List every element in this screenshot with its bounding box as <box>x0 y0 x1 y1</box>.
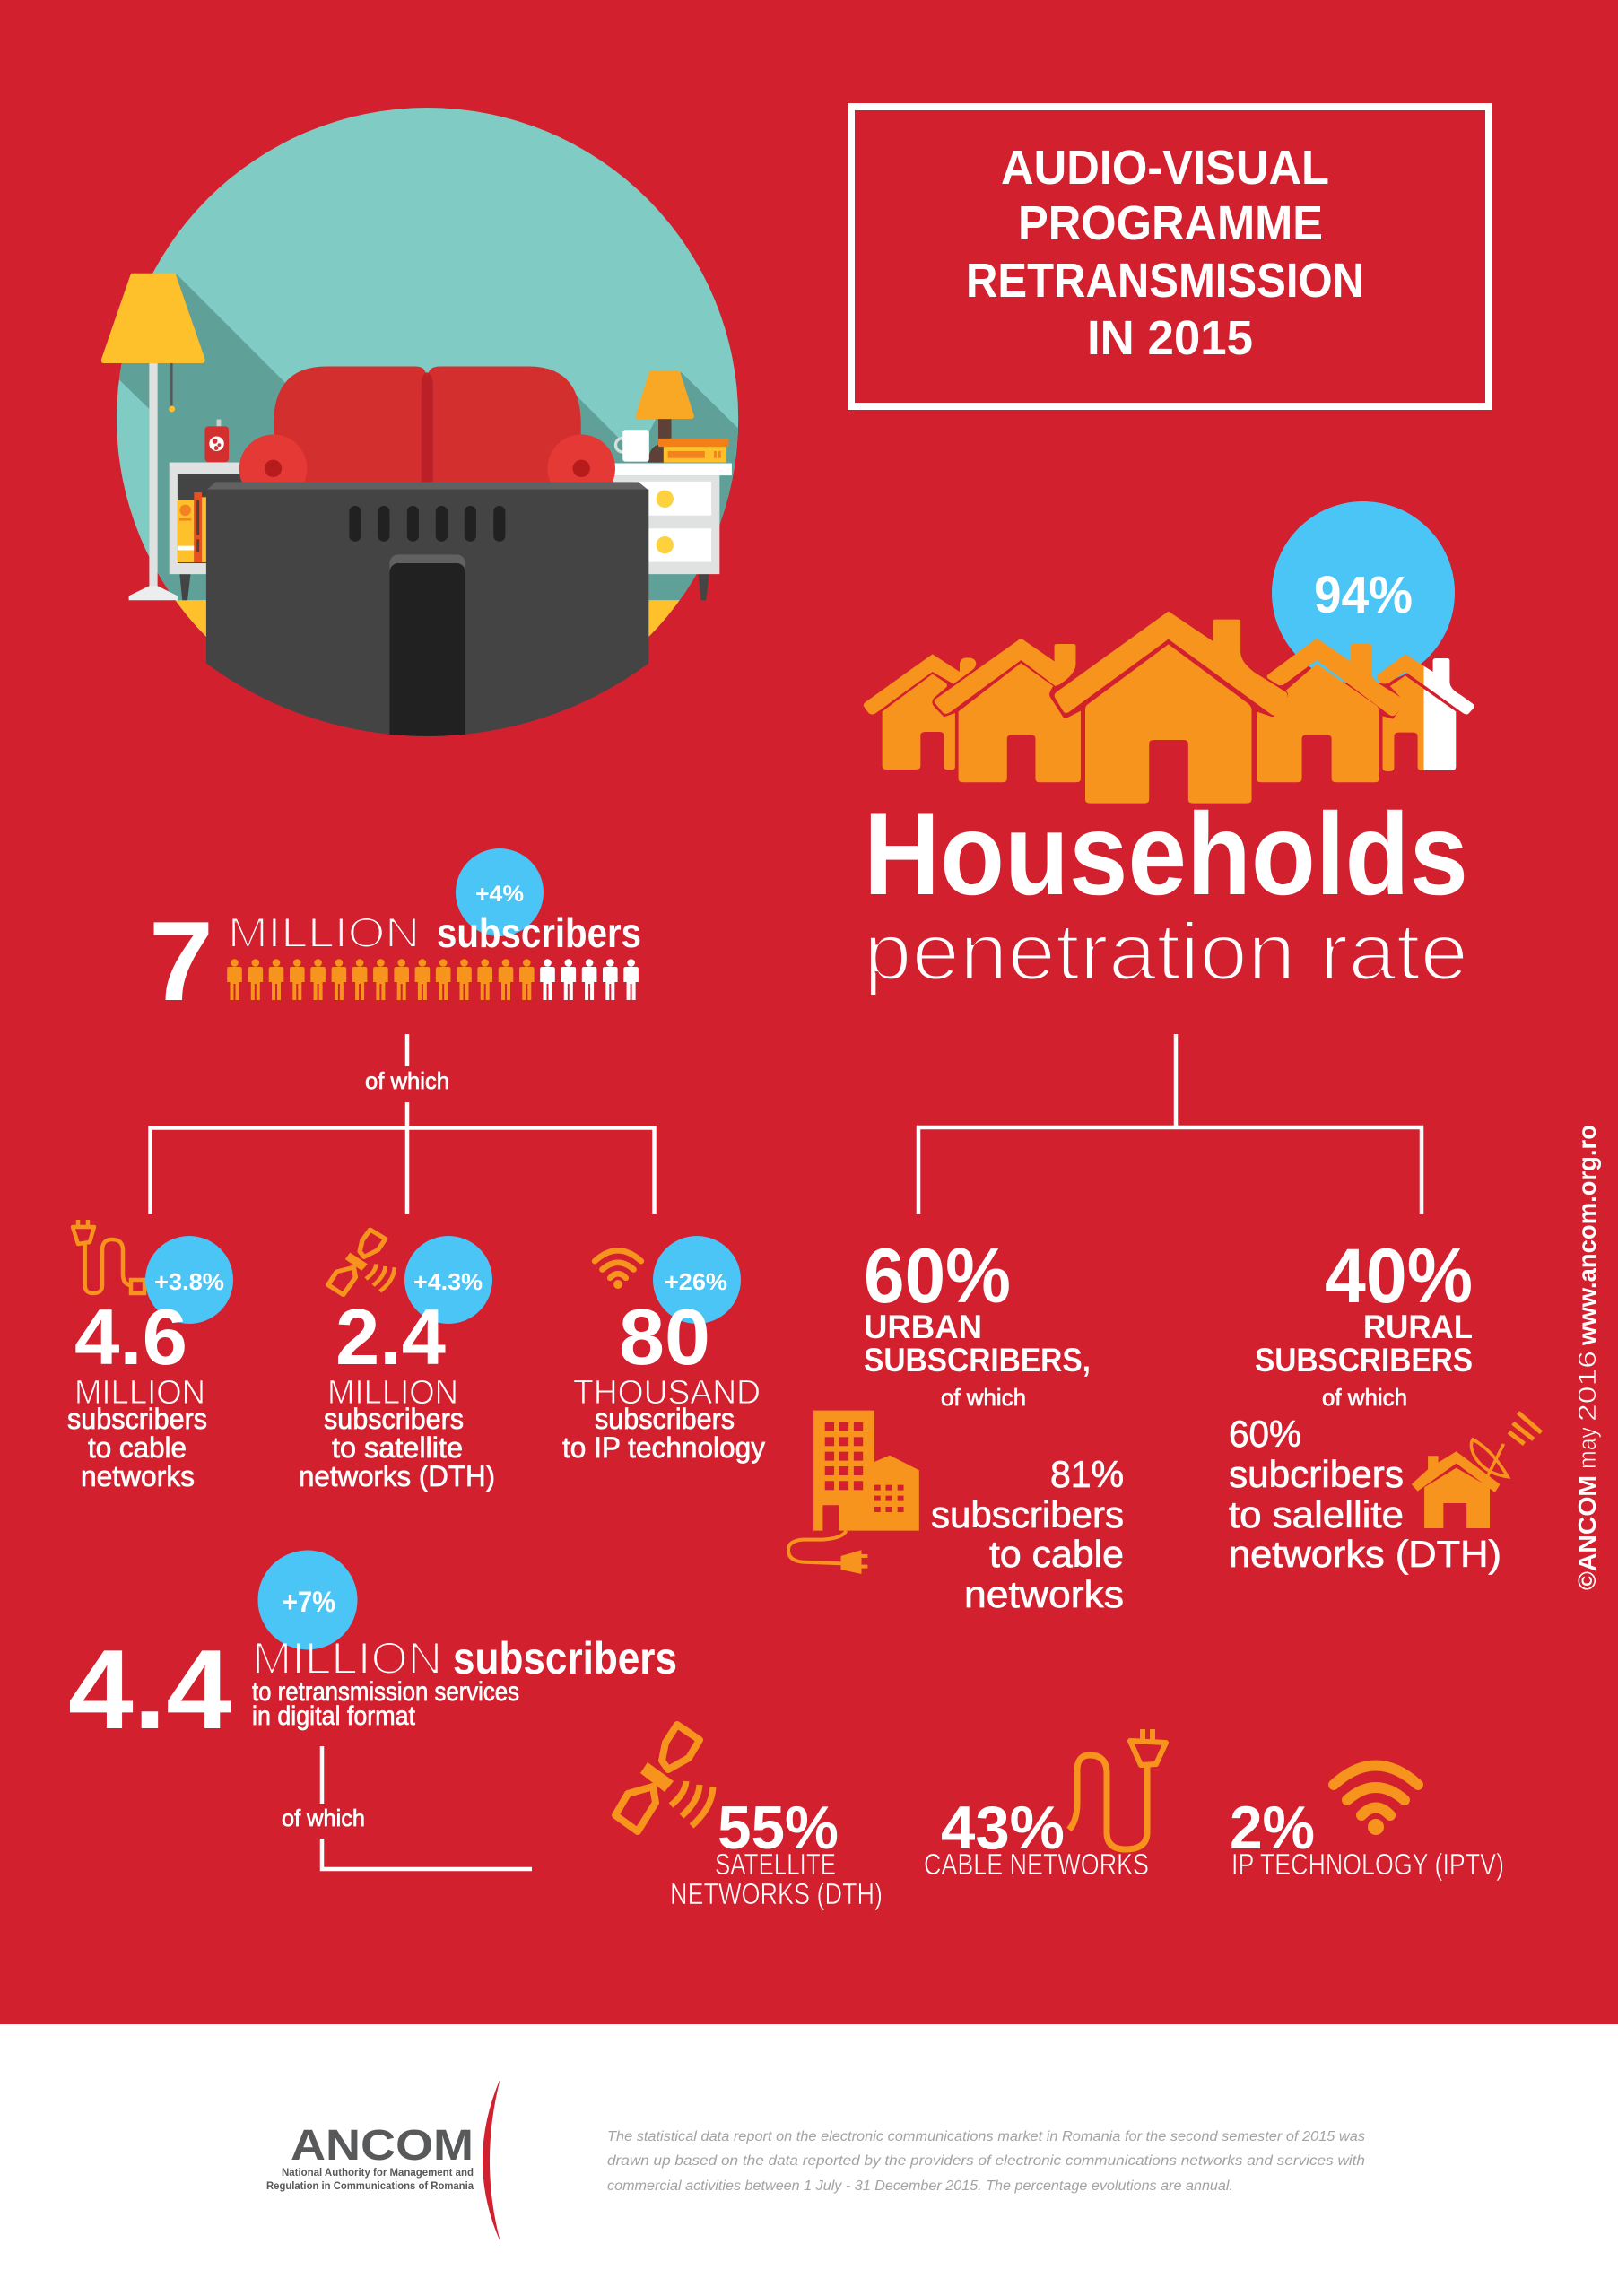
+4% bubble: +4% <box>475 882 524 907</box>
urban detail text: subscribers <box>931 1493 1124 1535</box>
urban detail text <box>931 1453 1124 1615</box>
MILLION digital: MILLION <box>252 1633 442 1683</box>
of which rural: of which <box>1322 1384 1407 1411</box>
icon: wifi large <box>1334 1765 1418 1835</box>
icon: house with satellite dish <box>1412 1413 1541 1528</box>
icon: satellite <box>328 1230 395 1295</box>
can on shelf <box>204 420 229 462</box>
house 3, centre <box>1055 612 1288 804</box>
rural label: SUBSCRIBERS <box>1255 1342 1473 1378</box>
icon: plug large <box>1069 1729 1166 1849</box>
IP label: IP TECHNOLOGY (IPTV) <box>1231 1848 1504 1881</box>
footnote text: The statistical data report on the electronic communications market in Romania for the second semester of 2015 was <box>607 2129 1365 2144</box>
rural detail text: 60% <box>1229 1413 1301 1455</box>
urban label <box>864 1309 1091 1378</box>
illustration: living room with TV <box>101 108 742 754</box>
number 80: 80 <box>619 1292 710 1381</box>
ANCOM logo <box>266 2078 500 2242</box>
subscribers label: subscribers <box>437 909 641 956</box>
icon: plug and cable <box>73 1220 144 1293</box>
60% urban: 60% <box>864 1233 1011 1319</box>
stat: cable 43% <box>924 1729 1166 1881</box>
urban label: URBAN <box>864 1309 982 1345</box>
urban label: SUBSCRIBERS, <box>864 1342 1091 1378</box>
description: satellite: to satellite <box>332 1431 463 1464</box>
+26% bubble <box>653 1236 741 1324</box>
title box: AUDIO-VISUAL <box>1001 141 1329 195</box>
2%: 2% <box>1230 1794 1315 1862</box>
rural label <box>1255 1309 1473 1378</box>
+7% bubble: +7% <box>283 1586 335 1618</box>
40% rural: 40% <box>1325 1233 1473 1319</box>
43%: 43% <box>941 1794 1065 1862</box>
column: rural subscribers <box>1229 1233 1541 1575</box>
94% blue bubble: 94% <box>1314 566 1413 624</box>
description: satellite <box>299 1374 495 1492</box>
floor lamp <box>101 274 204 600</box>
rural label: RURAL <box>1363 1309 1473 1345</box>
footnote text: drawn up based on the data reported by the providers of electronic communications networks and services with <box>607 2153 1365 2169</box>
description: cable: to cable <box>88 1431 187 1464</box>
icon: wifi <box>595 1250 641 1289</box>
ANCOM logo: ANCOM <box>291 2122 474 2170</box>
bookshelf <box>170 463 243 600</box>
heading: Households: Households <box>864 788 1468 919</box>
floor <box>176 600 680 637</box>
column: cable networks <box>67 1220 233 1492</box>
title box: PROGRAMME <box>1018 196 1323 250</box>
column: urban subscribers <box>788 1233 1124 1615</box>
description: cable: MILLION <box>74 1374 205 1412</box>
house 5, part orange part white <box>1377 654 1474 771</box>
red sofa <box>239 366 615 502</box>
urban detail text: networks <box>964 1573 1124 1615</box>
description: satellite: MILLION <box>327 1374 458 1412</box>
rural detail text <box>1229 1413 1501 1575</box>
digital subscribers block <box>68 1550 677 1752</box>
tree connector: left with of which <box>151 1034 655 1214</box>
room circle <box>117 108 738 729</box>
dresser with lamp, mug and books <box>613 370 732 600</box>
side credit: ANCOM may 2016 www.ancom.org.ro: www.ancom.org.ro <box>1573 1125 1601 1346</box>
stat: IP 2% <box>1230 1765 1504 1881</box>
side credit: ANCOM may 2016 www.ancom.org.ro <box>1573 1125 1601 1590</box>
satellite label: NETWORKS (DTH) <box>670 1877 883 1910</box>
number 2.4: 2.4 <box>335 1292 446 1381</box>
description: satellite: networks (DTH) <box>299 1460 495 1492</box>
title box: RETRANSMISSION <box>966 254 1364 308</box>
description: cable: subscribers <box>67 1403 207 1435</box>
column: satellite networks <box>299 1230 495 1492</box>
column: IP technology <box>562 1236 765 1464</box>
+7% bubble <box>258 1550 357 1650</box>
house 1 <box>864 654 976 770</box>
subscribers digital: subscribers <box>453 1633 677 1683</box>
side credit: ANCOM may 2016 www.ancom.org.ro: ©ANCOM <box>1573 1475 1601 1590</box>
side credit: ANCOM may 2016 www.ancom.org.ro: 2016 <box>1573 1351 1601 1422</box>
footnote text <box>607 2129 1365 2194</box>
stat: satellite 55% <box>615 1725 883 1910</box>
television seen from behind <box>206 482 648 754</box>
of which urban: of which <box>941 1384 1026 1411</box>
title box: IN 2015 <box>1087 311 1253 365</box>
footer <box>266 2078 1365 2242</box>
connector with of which <box>282 1746 532 1869</box>
long wall shadows <box>118 274 738 600</box>
icon: buildings with cable <box>788 1411 919 1574</box>
tree connector: left with of which: of which <box>365 1067 449 1094</box>
house 2 <box>935 639 1081 782</box>
+3.8% bubble <box>145 1236 233 1324</box>
number 4.6: 4.6 <box>74 1292 187 1381</box>
94% blue bubble <box>1272 501 1455 684</box>
urban detail text: to cable <box>989 1533 1124 1575</box>
people pictogram: 15 of 20 orange <box>227 959 639 1000</box>
icon: satellite large <box>615 1725 713 1831</box>
digital description: in digital format <box>252 1701 416 1731</box>
MILLION label: MILLION <box>228 909 420 956</box>
description: satellite: subscribers <box>324 1403 464 1435</box>
description: cable: networks <box>81 1460 195 1492</box>
+4.3% bubble: +4.3% <box>413 1268 483 1295</box>
cable label: CABLE NETWORKS <box>924 1848 1149 1881</box>
total subscribers block <box>149 848 641 1024</box>
ANCOM logo: Regulation in Communications of Romania <box>266 2181 474 2192</box>
+26% bubble: +26% <box>665 1268 727 1295</box>
title box <box>851 107 1489 406</box>
icon: row of houses <box>864 612 1474 804</box>
ANCOM logo: National Authority for Management and <box>282 2168 474 2179</box>
satellite label: SATELLITE <box>715 1848 836 1881</box>
side credit: ANCOM may 2016 www.ancom.org.ro: may <box>1573 1427 1601 1469</box>
description: IP: to IP technology <box>562 1431 765 1464</box>
rural detail text: networks (DTH) <box>1229 1533 1501 1575</box>
description: IP <box>562 1374 765 1464</box>
big number 7: 7 <box>149 898 213 1024</box>
digital description: to retransmission services <box>252 1677 519 1707</box>
digital description <box>252 1677 519 1731</box>
rural detail text: subcribers <box>1229 1453 1404 1495</box>
subheading: penetration rate: penetration rate <box>864 908 1468 997</box>
satellite label <box>670 1848 883 1910</box>
house 4 <box>1257 639 1405 782</box>
number 4.4: 4.4 <box>68 1626 231 1752</box>
footnote text: commercial activities between 1 July - 31 December 2015. The percentage evolutions are annual. <box>607 2179 1233 2194</box>
urban detail text: 81% <box>1050 1453 1124 1495</box>
+4.3% bubble <box>404 1236 492 1324</box>
+4% bubble <box>456 848 544 936</box>
description: cable <box>67 1374 207 1492</box>
tree connector: right <box>918 1034 1422 1214</box>
+3.8% bubble: +3.8% <box>154 1268 224 1295</box>
description: IP: THOUSAND <box>573 1374 761 1412</box>
55%: 55% <box>718 1794 839 1862</box>
rural detail text: to salellite <box>1229 1493 1404 1535</box>
description: IP: subscribers <box>595 1403 735 1435</box>
connector with of which: of which <box>282 1805 365 1831</box>
